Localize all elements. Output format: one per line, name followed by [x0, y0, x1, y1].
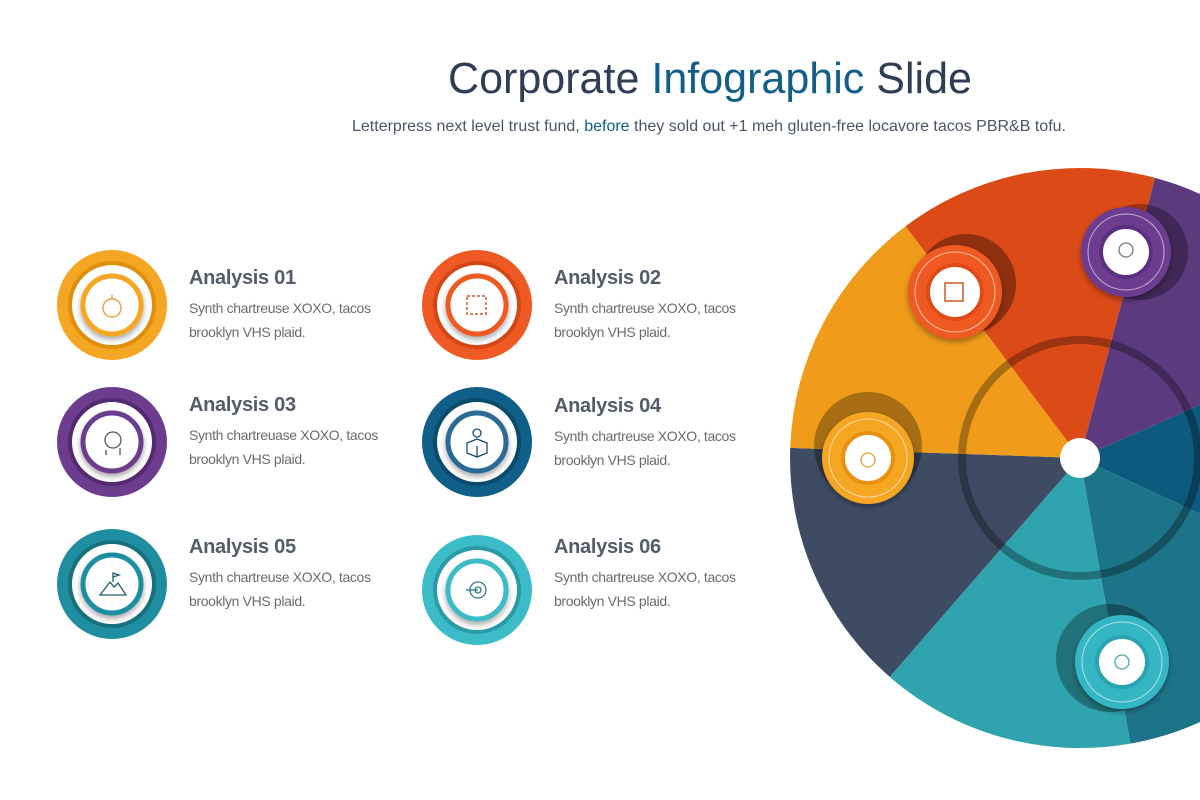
text: Analysis 06: Analysis 06: [554, 536, 661, 558]
badge: orange: [908, 234, 1016, 339]
text: Analysis 05: Analysis 05: [189, 536, 296, 558]
text: Analysis 02: [554, 267, 736, 340]
text: Analysis 02: Synth chartreuse XOXO, tacos brooklyn VHS plaid.: [554, 300, 736, 340]
text: Analysis 03: Analysis 03: [189, 394, 296, 416]
title: Corporate Infographic Slide: [448, 54, 972, 103]
text: Analysis 04: [554, 395, 736, 468]
text: Analysis 01: Synth chartreuse XOXO, tacos brooklyn VHS plaid.: [189, 300, 371, 340]
pie chart: [790, 168, 1200, 748]
text: Analysis 01: [189, 267, 371, 340]
icon circle 05: [63, 535, 161, 633]
badge: yellow: [814, 392, 922, 504]
text: Analysis 04: Synth chartreuse XOXO, tacos brooklyn VHS plaid.: [554, 428, 736, 468]
icon circle 02: [428, 256, 526, 354]
text: Analysis 03: Synth chartreuase XOXO, tacos brooklyn VHS plaid.: [189, 427, 378, 467]
icon circle 01: [63, 256, 161, 354]
icon circle 06: [428, 541, 526, 639]
text: Analysis 06: Synth chartreuse XOXO, tacos brooklyn VHS plaid.: [554, 569, 736, 609]
badge: teal: [1056, 604, 1169, 712]
icon circle 04: [428, 393, 526, 491]
text: Analysis 06: [554, 536, 736, 609]
badge: purple: [1081, 204, 1188, 300]
text: Analysis 04: Analysis 04: [554, 395, 661, 417]
text: Analysis 02: Analysis 02: [554, 267, 661, 289]
text: Analysis 01: Analysis 01: [189, 267, 296, 289]
text: Analysis 05: Synth chartreuse XOXO, tacos brooklyn VHS plaid.: [189, 569, 371, 609]
text: Analysis 03: [189, 394, 378, 467]
text: Analysis 05: [189, 536, 371, 609]
icon circle 03: [63, 393, 161, 491]
subtitle: Letterpress next level trust fund, before they sold out +1 meh gluten-free locavore tacos PBR&B tofu.: [352, 118, 1066, 135]
